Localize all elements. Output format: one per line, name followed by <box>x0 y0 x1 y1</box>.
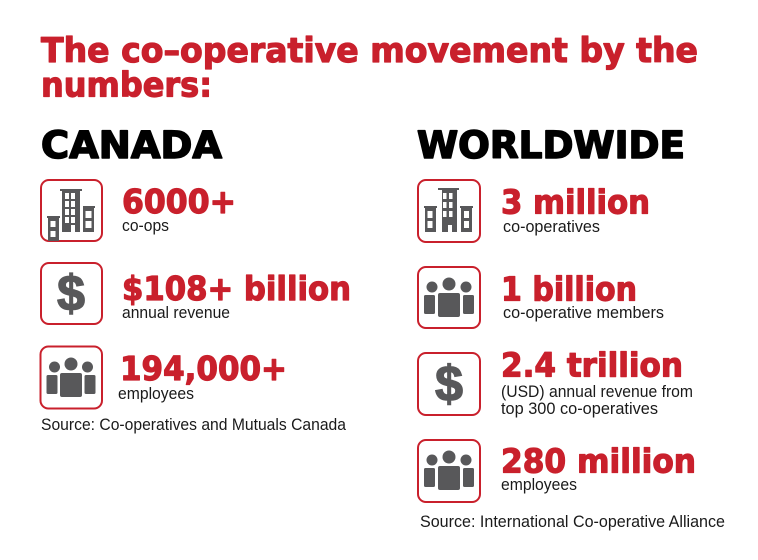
icon: dollar <box>41 263 102 324</box>
icon: dollar: $ <box>435 356 463 412</box>
panel: Worldwide members <box>418 267 664 328</box>
label: (USD) annual revenue from <box>501 383 693 401</box>
panel: Worldwide revenue <box>418 346 693 418</box>
title: The co–operative movement by the <box>41 31 698 71</box>
icon: dollar: $ <box>57 266 85 322</box>
label: employees <box>118 385 194 403</box>
label <box>501 383 693 418</box>
label: co-operatives <box>503 218 600 236</box>
label: co-operative members <box>503 304 664 322</box>
title <box>41 31 698 106</box>
title: numbers: <box>41 66 212 106</box>
figure: 6000+ <box>122 182 236 221</box>
figure: 280 million <box>501 442 696 480</box>
heading: Worldwide: WORLDWIDE <box>417 124 685 167</box>
panel: Canada revenue <box>41 263 351 324</box>
panel: Worldwide co-operatives <box>418 180 650 242</box>
figure: 194,000+ <box>120 349 287 388</box>
label: top 300 co-operatives <box>501 400 658 418</box>
label: co-ops <box>122 217 169 235</box>
heading: Canada: CANADA <box>41 124 222 167</box>
icon: people <box>418 267 480 328</box>
icon: people <box>40 346 102 408</box>
icon: buildings <box>41 180 102 241</box>
figure: 1 billion <box>501 270 637 308</box>
figure: 2.4 trillion <box>501 346 683 384</box>
panel: Worldwide employees <box>418 440 696 502</box>
source: Worldwide: Source: International Co-operative Alliance <box>420 513 725 531</box>
icon: dollar <box>418 353 480 415</box>
panel: Canada employees <box>40 346 287 408</box>
panel: Canada co-ops <box>41 180 236 241</box>
figure: $108+ billion <box>122 269 351 308</box>
label: annual revenue <box>122 304 230 322</box>
icon: buildings <box>418 180 480 242</box>
label: employees <box>501 476 577 494</box>
source: Canada: Source: Co-operatives and Mutuals Canada <box>41 416 347 434</box>
figure: 3 million <box>501 182 650 222</box>
icon: people <box>418 440 480 502</box>
